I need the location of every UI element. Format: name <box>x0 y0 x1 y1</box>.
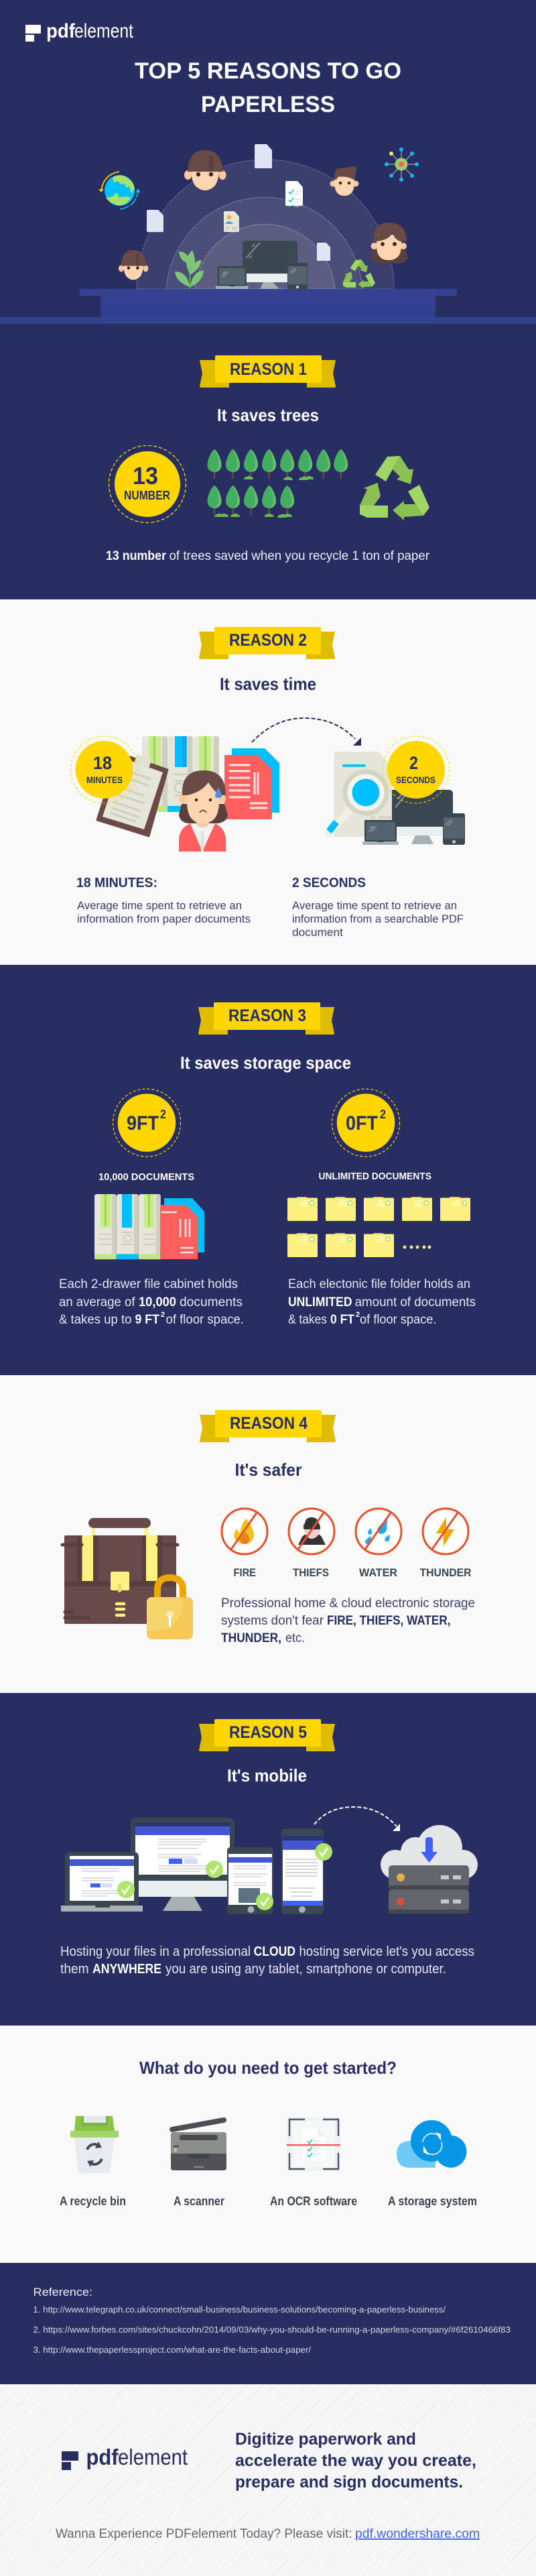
illustration: eight folders <box>287 1197 470 1257</box>
badge: 0 square feet <box>332 1089 399 1157</box>
text: electronic storage description: Each electonic file folder holds an <box>288 1277 470 1291</box>
text: tagline: prepare and sign documents. <box>235 2473 463 2492</box>
text: safer description: etc. <box>285 1631 305 1645</box>
heading: it saves trees: It saves trees <box>217 405 319 425</box>
ribbon: reason 5: REASON 5 <box>229 1723 307 1742</box>
inner dome <box>195 224 335 289</box>
text: trees statement: of trees saved when you recycle 1 ton of paper <box>169 549 430 563</box>
illustration: paperless office domes <box>0 144 536 324</box>
arrow: paper to digital <box>252 718 361 746</box>
badge: 2 seconds: SECONDS <box>396 774 436 785</box>
panel: reason 2 <box>0 599 536 965</box>
text: 18 minutes description: 18 MINUTES: <box>76 876 157 890</box>
icon: tablet <box>287 263 308 290</box>
ribbon: reason 1: REASON 1 <box>230 360 307 379</box>
icon: recycle symbol <box>343 259 375 289</box>
text: paper storage description: an average of <box>59 1295 135 1309</box>
icon: woman head <box>371 223 408 264</box>
labels: risks: FIRE <box>233 1567 256 1579</box>
laptop <box>362 820 399 845</box>
panel: reason 3 <box>0 965 536 1375</box>
title: TOP 5 REASONS TO GO <box>135 58 401 84</box>
text: safer description <box>221 1596 475 1645</box>
text: reference list: 2. https://www.forbes.com/sites/chuckcohn/2014/09/03/why-you-should-be-running-a-paperless-company/#6f2610466f83 <box>34 2325 511 2335</box>
icon: man head small <box>119 250 148 280</box>
labels: what you need: A scanner <box>174 2194 224 2208</box>
logo: pdfelement: pdf <box>46 20 76 42</box>
badge: 13 number: 13 <box>133 462 158 489</box>
badge: 18 minutes <box>71 736 138 803</box>
text: 2 seconds description: Average time spent to retrieve an <box>292 900 457 912</box>
text: mobile description <box>60 1944 474 1977</box>
badge: 2 seconds <box>383 736 450 803</box>
text: paper storage description: 2 <box>161 1311 165 1319</box>
icon: monitor <box>243 241 297 289</box>
badge: 2 seconds: 2 <box>409 753 418 773</box>
desk and floor <box>0 289 536 324</box>
badge: 9 square feet: 9FT <box>127 1112 159 1134</box>
text: visit call to action: Wanna Experience PDFelement Today? Please visit: <box>56 2527 352 2541</box>
download arrow <box>421 1837 438 1863</box>
badge: 13 number: NUMBER <box>124 489 170 502</box>
icon: man head large <box>184 150 226 190</box>
text: paper storage description: documents <box>180 1295 243 1309</box>
logo: pdfelement footer: element <box>118 2445 188 2469</box>
icon: plain document left <box>147 210 163 232</box>
text: 2 seconds description: information from a searchable PDF <box>292 913 464 925</box>
text: tagline: accelerate the way you create, <box>235 2451 476 2470</box>
text: reference list: 1. http://www.telegraph.co.uk/connect/small-business/business-solutions/becoming-a-paperless-business/ <box>34 2305 446 2315</box>
text: electronic storage description: 0 FT <box>330 1313 354 1327</box>
middle dome <box>166 197 362 289</box>
text: 18 minutes description: Average time spent to retrieve an <box>77 900 242 912</box>
text: 2 seconds description: 2 SECONDS <box>292 876 366 890</box>
icon: checklist document <box>285 181 303 207</box>
title: PAPERLESS <box>201 92 335 117</box>
labels: what you need: An OCR software <box>270 2194 357 2208</box>
text: trees statement: 13 number <box>106 549 167 563</box>
panel: page header <box>0 0 536 599</box>
labels: risks: THUNDER <box>419 1567 472 1579</box>
briefcase <box>62 1518 178 1624</box>
logo: pdfelement: element <box>74 20 134 42</box>
text: mobile description: them <box>60 1962 89 1977</box>
heading: it's mobile: It's mobile <box>227 1765 307 1785</box>
laptop <box>61 1852 143 1912</box>
panel: reason 5 <box>0 1693 536 2026</box>
panel: footer call to action <box>0 2384 536 2576</box>
labels: risks: THIEFS <box>293 1567 329 1579</box>
woman <box>179 770 228 852</box>
clipboard <box>97 753 168 836</box>
text: 18 minutes description <box>76 876 251 925</box>
text: paper storage description <box>59 1277 244 1327</box>
text: safer description: systems don't fear <box>221 1614 324 1628</box>
text: electronic storage description: 2 <box>356 1311 360 1319</box>
text: tagline <box>235 2430 476 2492</box>
text: 2 seconds description <box>292 876 464 939</box>
text: reference list: 3. http://www.thepaperlessproject.com/what-are-the-facts-about-paper/ <box>34 2345 312 2355</box>
text: reference list <box>34 2305 511 2355</box>
server rack <box>389 1865 469 1914</box>
labels: what you need: A recycle bin <box>60 2194 126 2208</box>
binders <box>142 736 219 812</box>
badge: 0 square feet: 0FT <box>346 1112 378 1134</box>
badge: 9 square feet <box>113 1089 181 1157</box>
heading: it's safer: It's safer <box>234 1460 302 1480</box>
badge: 13 number <box>109 445 186 523</box>
illustration: paper documents and stressed woman <box>71 736 279 852</box>
chart: 13 trees pictogram <box>208 449 348 518</box>
icon: no thieves <box>289 1509 334 1554</box>
logo: pdfelement <box>25 20 134 42</box>
ribbon: reason 1 <box>200 355 336 388</box>
outer dome <box>137 160 394 289</box>
labels: what you need: A storage system <box>388 2194 477 2208</box>
text: mobile description: CLOUD <box>254 1944 295 1959</box>
text: electronic storage description: & takes <box>288 1313 327 1327</box>
icon: globe <box>98 172 141 209</box>
icon: scanner <box>171 2120 226 2170</box>
ribbon: reason 5 <box>199 1719 335 1751</box>
arrow: devices to cloud <box>314 1807 400 1831</box>
monitor <box>392 790 453 844</box>
check marks <box>117 1843 332 1910</box>
icon: plant <box>175 250 204 289</box>
label: 10,000 documents: 10,000 DOCUMENTS <box>98 1171 194 1183</box>
text: visit call to action: pdf.wondershare.com <box>355 2527 480 2541</box>
ribbon: reason 3 <box>198 1002 334 1035</box>
icon: no water <box>356 1509 401 1554</box>
tablet <box>227 1847 273 1914</box>
text: mobile description: you are using any tablet, smartphone or computer. <box>165 1962 446 1977</box>
heading: what do you need: What do you need to get started? <box>139 2058 397 2078</box>
text: electronic storage description: of floor space. <box>360 1313 437 1327</box>
panel: reason 4 <box>0 1375 536 1693</box>
tablet <box>443 813 465 845</box>
blue and red documents <box>224 748 279 819</box>
illustration: binders and folders <box>94 1194 204 1259</box>
heading: it saves storage space: It saves storage space <box>180 1053 351 1073</box>
icon: no fire <box>222 1509 267 1554</box>
badge: 18 minutes: MINUTES <box>86 774 123 785</box>
ribbon: reason 4 <box>200 1410 336 1442</box>
badge: 0 square feet: 2 <box>380 1108 386 1121</box>
icon: network hub <box>385 148 419 182</box>
panel: references <box>0 2263 536 2384</box>
icon: plain document top <box>255 144 272 168</box>
text: paper storage description: 10,000 <box>139 1295 176 1309</box>
text: safer description: FIRE, THIEFS, WATER, <box>327 1614 450 1628</box>
icon: recycle bin <box>70 2116 119 2173</box>
phone <box>281 1828 324 1914</box>
text: mobile description: hosting service let's you access <box>299 1944 474 1959</box>
icon: cloud storage <box>397 2120 466 2168</box>
title <box>135 58 401 117</box>
text: safer description: Professional home & cloud electronic storage <box>221 1596 475 1611</box>
icon: large recycle symbol <box>360 456 429 520</box>
text: paper storage description: & takes up to <box>59 1313 131 1327</box>
ribbon: reason 2 <box>199 627 335 659</box>
text: mobile description: ANYWHERE <box>92 1962 161 1977</box>
panel: reason 1 <box>106 355 430 563</box>
illustration: devices with website <box>61 1818 332 1914</box>
badge: 18 minutes: 18 <box>93 753 112 773</box>
text: paper storage description: of floor space. <box>166 1313 244 1327</box>
ribbon: reason 2: REASON 2 <box>229 631 307 650</box>
padlock <box>147 1578 193 1639</box>
text: 18 minutes description: information from paper documents <box>77 913 251 925</box>
monitor <box>131 1818 234 1911</box>
logo: pdfelement footer: pdf <box>86 2445 119 2469</box>
illustration: cloud server <box>381 1825 478 1914</box>
text: safer description: THUNDER, <box>221 1631 281 1645</box>
text: mobile description: Hosting your files in a professional <box>60 1944 251 1959</box>
labels: risks <box>233 1567 472 1579</box>
ribbon: reason 4: REASON 4 <box>230 1414 308 1433</box>
heading: it saves time: It saves time <box>220 674 316 694</box>
illustration: searchable PDF on devices <box>328 736 465 845</box>
icon: laptop <box>216 266 249 289</box>
badge: 9 square feet: 2 <box>160 1108 166 1121</box>
text: paper storage description: Each 2-drawer file cabinet holds <box>59 1277 238 1291</box>
text: electronic storage description <box>288 1277 476 1327</box>
icon: plain document right <box>317 243 330 261</box>
icon: OCR scan <box>287 2117 340 2171</box>
text: paper storage description: 9 FT <box>135 1313 159 1327</box>
cloud <box>381 1825 478 1884</box>
logo: pdfelement footer <box>62 2445 188 2470</box>
text: tagline: Digitize paperwork and <box>235 2430 416 2449</box>
document with magnifier <box>328 752 392 837</box>
icon: man with quiff <box>330 166 359 196</box>
text: electronic storage description: amount of documents <box>355 1295 476 1309</box>
illustration: briefcase with padlock <box>62 1518 193 1639</box>
text: 2 seconds description: document <box>292 927 343 939</box>
panel: what you need <box>0 2026 536 2263</box>
icon: resume document <box>224 211 239 232</box>
labels: risks: WATER <box>359 1567 397 1579</box>
ribbon: reason 3: REASON 3 <box>228 1006 306 1025</box>
labels: what you need <box>60 2194 477 2208</box>
icon: no thunder <box>423 1509 468 1554</box>
text: electronic storage description: UNLIMITED <box>288 1295 352 1309</box>
label: unlimited documents: UNLIMITED DOCUMENTS <box>319 1171 431 1182</box>
heading: reference: Reference: <box>34 2286 92 2298</box>
